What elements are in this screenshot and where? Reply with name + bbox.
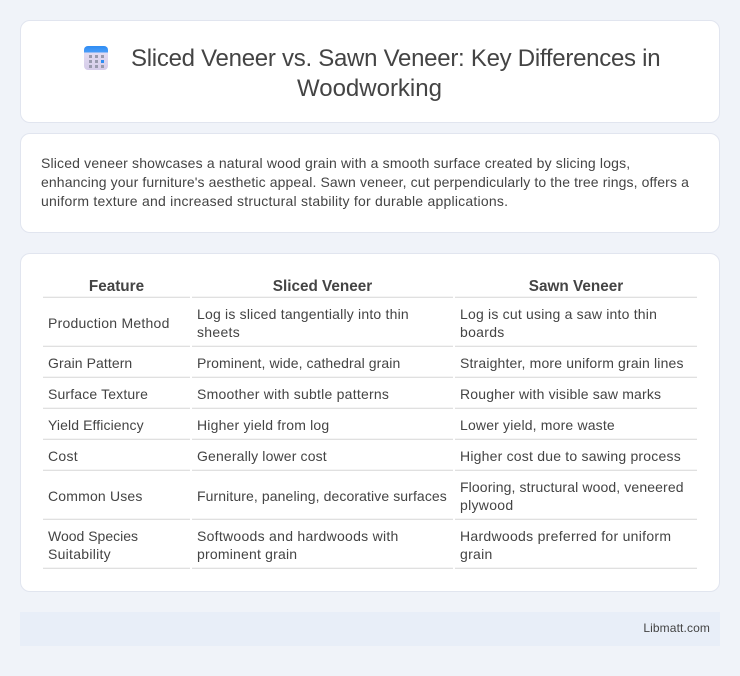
panel: comparison table: Smoother with subtle patterns bbox=[197, 386, 389, 402]
panel: comparison table: Higher yield from log bbox=[197, 417, 329, 433]
intro text: enhancing your furniture's aesthetic appeal. Sawn veneer, cut perpendicularly to the tree rings, offers a bbox=[41, 174, 689, 190]
panel: comparison table: sheets bbox=[197, 324, 240, 340]
panel: comparison table: Flooring, structural wood, veneered bbox=[460, 479, 684, 495]
panel: introduction bbox=[20, 133, 720, 233]
panel: comparison table: Higher cost due to sawing process bbox=[460, 448, 681, 464]
icon: calendar bbox=[84, 46, 108, 70]
panel: comparison table: Rougher with visible saw marks bbox=[460, 386, 661, 402]
footer credit: Libmatt.com bbox=[643, 621, 710, 635]
row: Surface Texture: Surface Texture bbox=[48, 386, 148, 402]
panel: comparison table: Lower yield, more waste bbox=[460, 417, 615, 433]
panel: comparison table: boards bbox=[460, 324, 505, 340]
table header: Sliced Veneer: Sliced Veneer bbox=[273, 278, 372, 295]
panel: comparison table: Log is sliced tangentially into thin bbox=[197, 306, 409, 322]
panel: comparison table: Hardwoods preferred for uniform bbox=[460, 528, 671, 544]
row: Cost: Cost bbox=[48, 448, 78, 464]
table header: Feature: Feature bbox=[89, 278, 144, 295]
panel: comparison table: Softwoods and hardwoods with bbox=[197, 528, 399, 544]
row: Wood Species Suitability: Wood Species bbox=[48, 528, 138, 544]
row: Grain Pattern: Grain Pattern bbox=[48, 355, 132, 371]
title: Woodworking bbox=[297, 75, 442, 102]
intro text: Sliced veneer showcases a natural wood grain with a smooth surface created by slicing logs, bbox=[41, 155, 630, 171]
panel: title card bbox=[20, 20, 720, 123]
panel: comparison table: plywood bbox=[460, 497, 513, 513]
table header: Sawn Veneer: Sawn Veneer bbox=[529, 278, 623, 295]
intro text bbox=[41, 155, 689, 209]
panel: comparison table: Log is cut using a saw into thin bbox=[460, 306, 657, 322]
row: Common Uses: Common Uses bbox=[48, 488, 143, 504]
panel: comparison table: Straighter, more uniform grain lines bbox=[460, 355, 684, 371]
panel: comparison table: prominent grain bbox=[197, 546, 297, 562]
title bbox=[131, 45, 660, 102]
title: Sliced Veneer vs. Sawn Veneer: Key Differences in bbox=[131, 45, 660, 72]
panel: comparison table: Prominent, wide, cathedral grain bbox=[197, 355, 400, 371]
row: Production Method: Production Method bbox=[48, 315, 170, 331]
panel: comparison table: Furniture, paneling, decorative surfaces bbox=[197, 488, 447, 504]
row: Yield Efficiency: Yield Efficiency bbox=[48, 417, 144, 433]
footer bbox=[20, 612, 720, 646]
panel: comparison table: grain bbox=[460, 546, 493, 562]
intro text: uniform texture and increased structural stability for durable applications. bbox=[41, 193, 508, 209]
panel: comparison table: Suitability bbox=[48, 546, 111, 562]
panel: comparison table: Generally lower cost bbox=[197, 448, 327, 464]
